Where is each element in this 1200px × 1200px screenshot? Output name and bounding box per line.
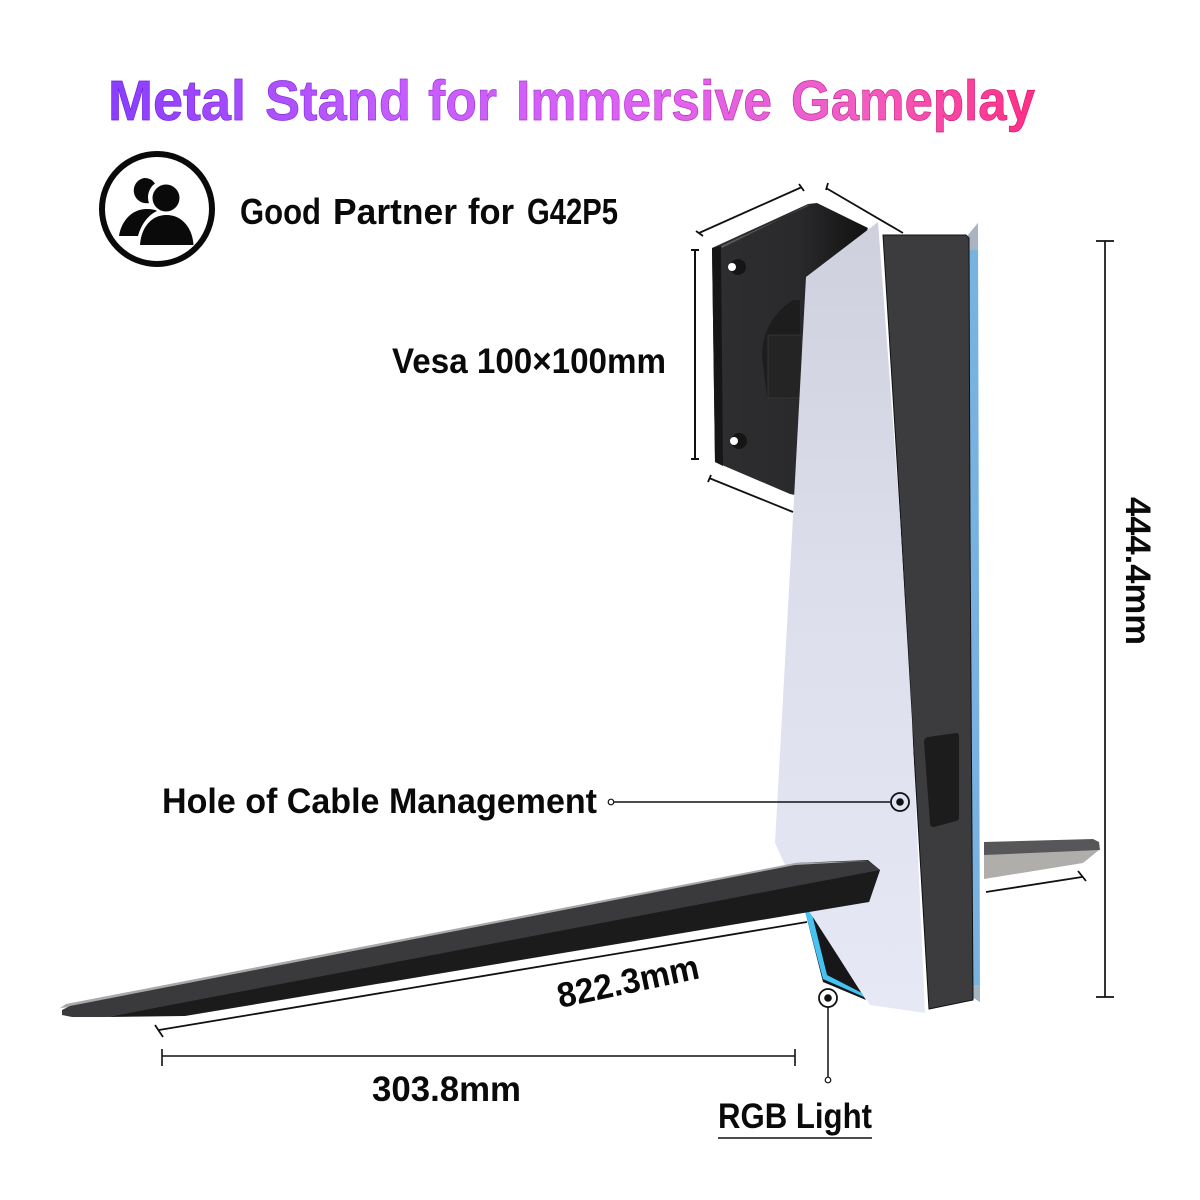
icon: partners bbox=[102, 154, 212, 264]
cable hole bbox=[924, 733, 959, 827]
dimension: foot depth bbox=[162, 1049, 795, 1066]
rear foot bbox=[984, 839, 1100, 879]
label: height: 444.4mm bbox=[1118, 497, 1157, 645]
label: RGB light: RGB Light bbox=[718, 1097, 872, 1136]
dimension: VESA bottom bbox=[708, 475, 793, 512]
label: foot length: 822.3mm bbox=[554, 948, 703, 1016]
callout: RGB pointer bbox=[819, 989, 837, 1083]
callout dark notch bbox=[795, 860, 880, 905]
dimension: VESA top left bbox=[696, 184, 804, 236]
subtitle: compatibility: Good bbox=[240, 191, 321, 232]
callout: cable hole pointer bbox=[608, 793, 909, 811]
title: Gameplay bbox=[791, 69, 1035, 133]
dimension: VESA left bbox=[691, 250, 699, 459]
blue back strip bbox=[968, 223, 980, 1002]
dimension: rear foot bbox=[986, 871, 1086, 892]
dimension: VESA top right bbox=[826, 183, 903, 233]
title: for bbox=[428, 69, 497, 133]
front foot bbox=[60, 861, 880, 1017]
RGB light detail bbox=[805, 910, 866, 1000]
subtitle: compatibility: Partner bbox=[333, 191, 457, 232]
title: Immersive bbox=[516, 69, 772, 133]
dimension: foot length bbox=[155, 922, 807, 1037]
subtitle: compatibility: G42P5 bbox=[527, 191, 618, 232]
label: VESA size: Vesa 100×100mm bbox=[392, 342, 666, 381]
subtitle: compatibility: for bbox=[468, 191, 514, 232]
VESA mounting plate bbox=[712, 203, 868, 500]
white column bbox=[775, 222, 925, 1013]
label: foot depth: 303.8mm bbox=[372, 1070, 521, 1109]
title: Stand bbox=[265, 69, 411, 133]
dark side panel bbox=[883, 235, 973, 1009]
title: Metal bbox=[108, 69, 246, 133]
dimension: height bbox=[1096, 241, 1114, 997]
monitor stand product drawing bbox=[60, 203, 1100, 1017]
label: cable hole: Hole of Cable Management bbox=[162, 782, 597, 821]
